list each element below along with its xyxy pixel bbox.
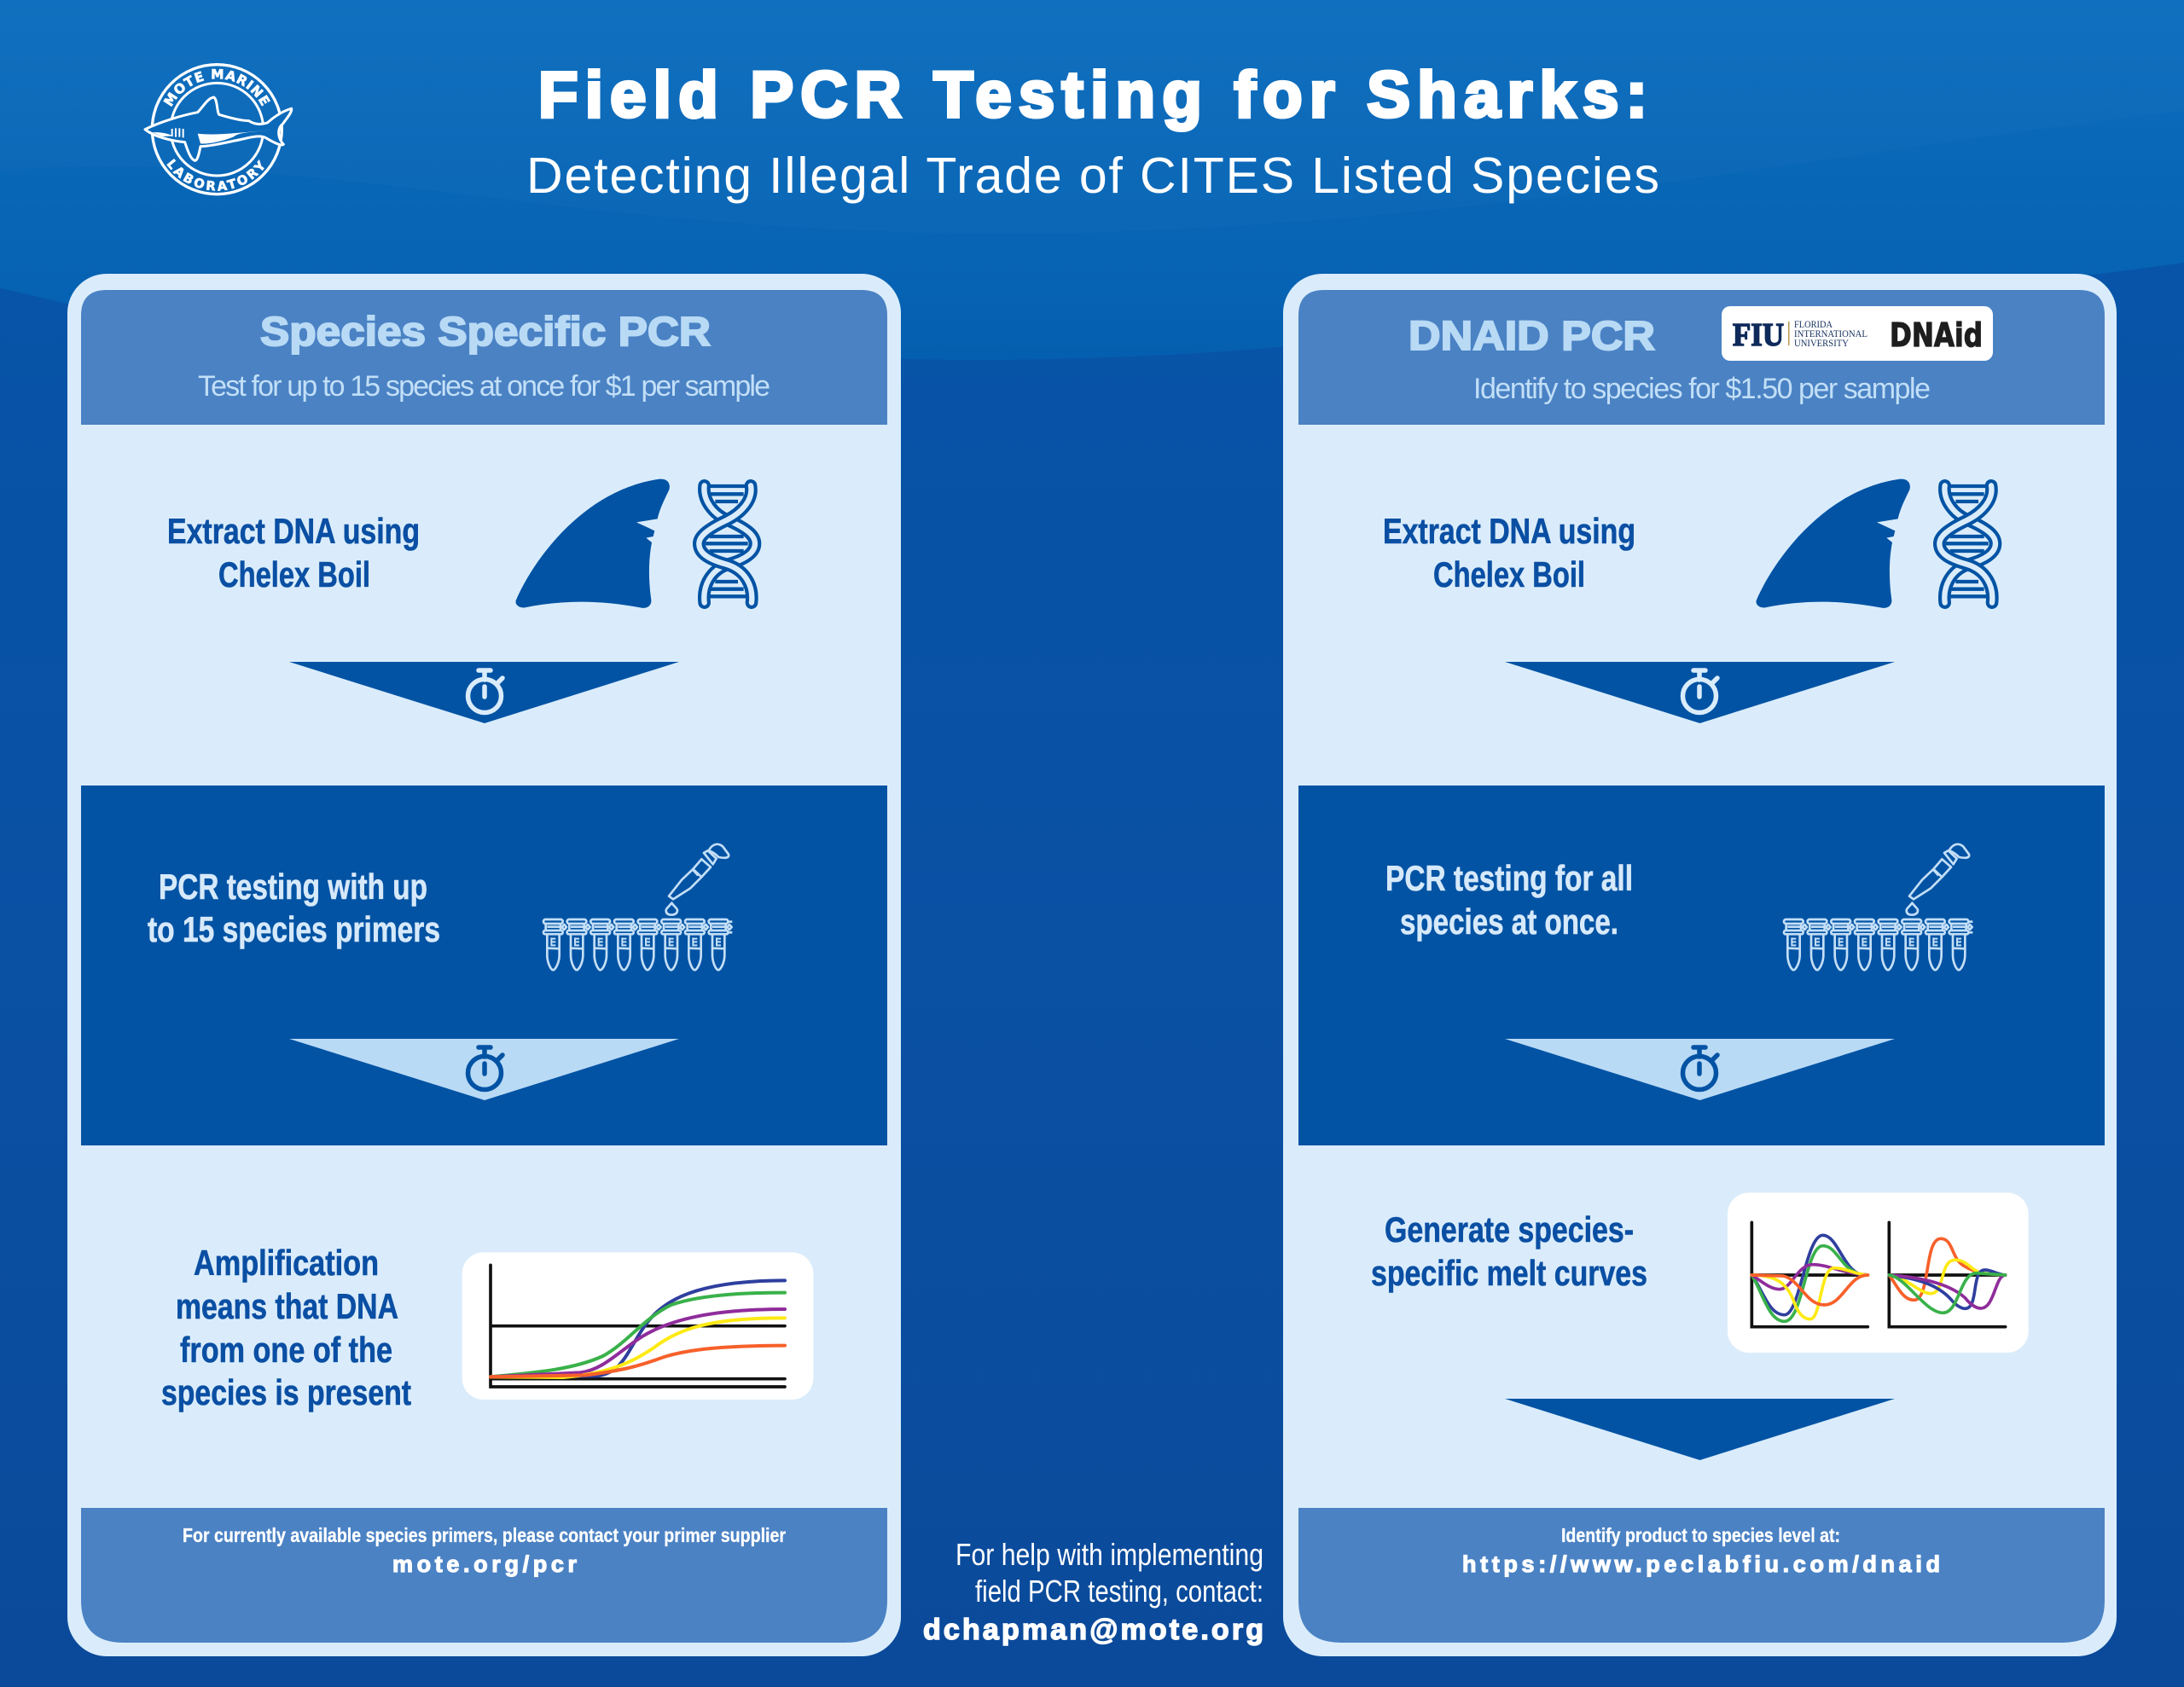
step band: PCR testing — [81, 786, 887, 1145]
contact text: For help with implementing — [956, 1537, 1263, 1572]
title: Field PCR Testing for Sharks: — [538, 59, 1647, 131]
icon: PCR tubes and pipette — [543, 844, 732, 970]
arrow with stopwatch on dark band — [1505, 1039, 1895, 1100]
step: melt curves text: specific melt curves — [1371, 1253, 1647, 1293]
step: extract DNA text: Chelex Boil — [1433, 554, 1585, 594]
step: amplification text: Amplification — [194, 1243, 379, 1283]
arrow with stopwatch — [289, 662, 679, 723]
step: amplification text: species is present — [161, 1372, 411, 1412]
icon: PCR tubes and pipette — [1784, 844, 1972, 970]
step: extract DNA text — [1383, 511, 1635, 594]
contact text: field PCR testing, contact: — [975, 1574, 1263, 1609]
arrow without stopwatch — [1505, 1399, 1895, 1460]
arrow with stopwatch on dark band — [289, 1039, 679, 1100]
chart: melt curves — [1728, 1192, 2029, 1353]
step band: PCR testing: PCR testing with up — [159, 867, 427, 907]
logo: Mote Marine Laboratory: MOTE MARINE — [163, 68, 270, 107]
subtitle: Detecting Illegal Trade of CITES Listed Species — [526, 148, 1659, 204]
contact text — [923, 1537, 1263, 1646]
icon: shark fin and DNA — [1756, 479, 1995, 608]
panel footer: https://www.peclabfiu.com/dnaid — [1462, 1551, 1940, 1577]
panel header — [81, 290, 887, 425]
panel header: Species Specific PCR — [260, 310, 711, 355]
icon: shark fin and DNA — [515, 479, 755, 608]
logos: FIU and DNAid: UNIVERSITY — [1794, 339, 1850, 349]
panel footer: mote.org/pcr — [392, 1551, 577, 1577]
panel header — [1298, 290, 2105, 425]
logos: FIU and DNAid: FIU — [1733, 317, 1784, 353]
chart: amplification curves — [462, 1252, 813, 1400]
step band: PCR testing — [1298, 786, 2105, 1145]
arrow with stopwatch — [1505, 662, 1895, 723]
panel header: Test for up to 15 species at once for $1 per sample — [198, 370, 770, 403]
step band: PCR testing: species at once. — [1400, 901, 1618, 942]
panel footer — [1298, 1508, 2105, 1643]
panel footer — [81, 1508, 887, 1643]
contact text: dchapman@mote.org — [923, 1614, 1263, 1646]
step: extract DNA text: Chelex Boil — [218, 554, 370, 594]
step: extract DNA text — [167, 511, 420, 594]
panel: Species Specific PCR — [67, 274, 901, 1656]
panel header: Identify to species for $1.50 per sample — [1473, 373, 1931, 405]
step band: PCR testing: PCR testing for all — [1385, 858, 1633, 898]
logo: Mote Marine Laboratory — [143, 63, 293, 196]
step: extract DNA text: Extract DNA using — [167, 511, 420, 551]
logo: Mote Marine Laboratory: LABORATORY — [166, 159, 264, 191]
step: amplification text: means that DNA — [176, 1286, 398, 1326]
step: amplification text: from one of the — [180, 1330, 392, 1370]
panel header: DNAID PCR — [1409, 314, 1655, 359]
step: amplification text — [161, 1243, 411, 1412]
panel footer: Identify product to species level at: — [1561, 1524, 1840, 1546]
logos: FIU and DNAid: INTERNATIONAL — [1794, 329, 1867, 339]
panel footer: For currently available species primers, please contact your primer supplier — [183, 1524, 786, 1546]
title — [526, 59, 1659, 204]
logos: FIU and DNAid: FLORIDA — [1794, 320, 1833, 330]
logos: FIU and DNAid: DNAid — [1890, 316, 1983, 354]
panel: DNAID PCR — [1283, 274, 2117, 1656]
step: melt curves text: Generate species- — [1385, 1209, 1634, 1249]
logos: FIU and DNAid — [1722, 306, 1993, 361]
step: extract DNA text: Extract DNA using — [1383, 511, 1635, 551]
step band: PCR testing: to 15 species primers — [148, 909, 440, 949]
step: melt curves text — [1371, 1209, 1647, 1293]
